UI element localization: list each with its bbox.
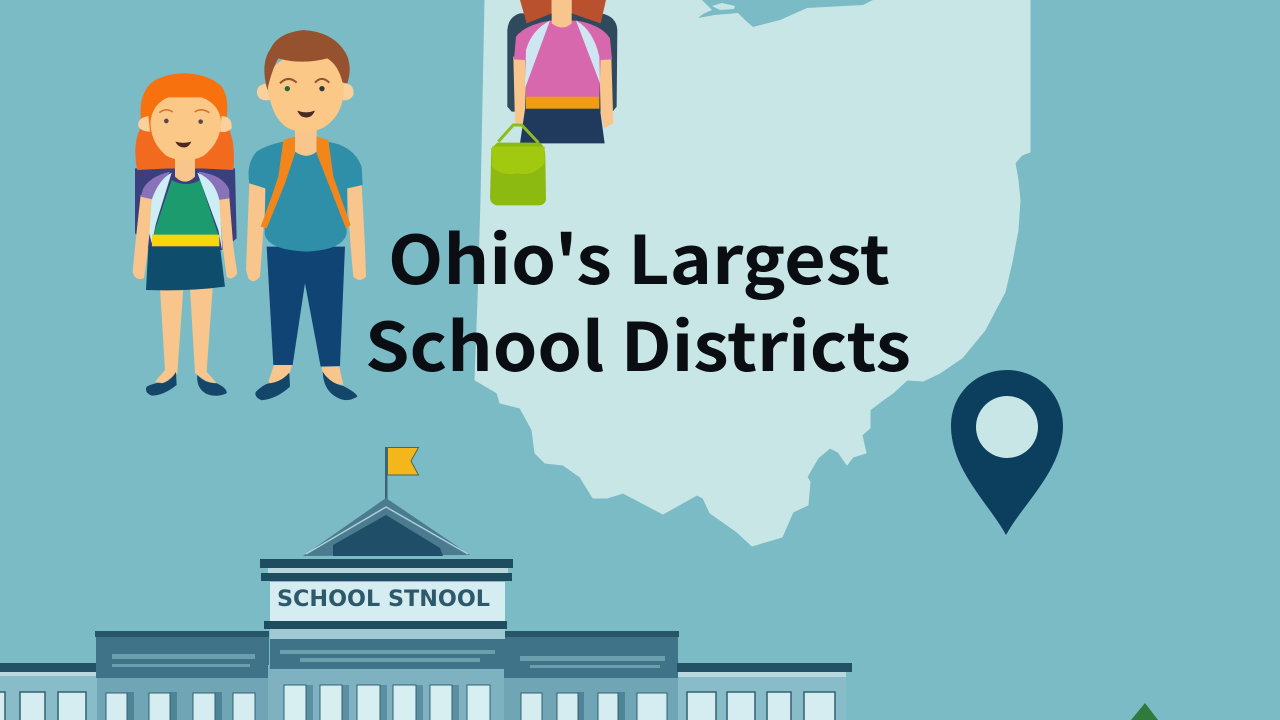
- eyebrows: [159, 110, 209, 113]
- wing windows: [106, 693, 255, 720]
- mouth: [297, 111, 315, 117]
- wing frieze texture: [112, 654, 255, 667]
- eyebrows: [280, 79, 329, 83]
- green bag handle: [498, 125, 538, 143]
- orange waistband: [526, 97, 599, 109]
- wing upper frieze: [96, 632, 269, 678]
- ears: [138, 116, 232, 132]
- wing body: [678, 671, 846, 720]
- illustration: school building: [0, 447, 852, 720]
- state shape: [475, 0, 1030, 546]
- center light band: [270, 629, 505, 639]
- center window shadows: [306, 685, 459, 720]
- teal shirt: [249, 142, 363, 252]
- face: [267, 55, 344, 132]
- right wing: [504, 631, 679, 720]
- wing windows: [521, 693, 667, 720]
- student: boy with orange backpack straps: [246, 30, 366, 400]
- ears: [257, 83, 354, 100]
- wing window shadows: [127, 692, 222, 720]
- lake erie: [698, 0, 873, 27]
- wing roof bar: [0, 663, 97, 672]
- neck: [552, 0, 572, 27]
- arms: [513, 57, 613, 128]
- center block: [260, 559, 513, 720]
- wing trim: [0, 672, 97, 676]
- wing lower body: [504, 676, 678, 720]
- wing frieze texture: [520, 656, 665, 668]
- lake island: [712, 3, 735, 10]
- pin hole: [976, 396, 1038, 458]
- face: [151, 97, 221, 160]
- title line 1: Ohio's Largest: [388, 207, 890, 304]
- sign lettering: SCHOOL STNOOL: [277, 587, 490, 612]
- green bag flap: [492, 147, 545, 174]
- arms: [133, 195, 237, 279]
- far right wing: [677, 663, 852, 720]
- yellow flag: [388, 448, 418, 475]
- right eye: [319, 86, 325, 91]
- arms: [246, 183, 366, 281]
- mouth: [175, 142, 191, 147]
- backpack: [507, 13, 617, 112]
- roof: [303, 498, 470, 556]
- eyes: [285, 86, 290, 91]
- pink shirt: [514, 21, 612, 97]
- map: Ohio: [475, 0, 1030, 546]
- orange straps: [261, 137, 351, 228]
- wing trim: [678, 672, 846, 677]
- wing lower body: [97, 676, 269, 720]
- sleeves: [141, 172, 229, 200]
- navy skirt: [146, 247, 225, 290]
- navy trousers: [267, 247, 345, 367]
- ankles: [268, 365, 343, 385]
- center lower body: [268, 665, 504, 720]
- student: girl with red hair: [133, 73, 237, 396]
- backpack: [135, 168, 237, 250]
- second cornice: [261, 573, 512, 581]
- top cornice: [260, 559, 513, 568]
- yellow belt: [152, 235, 219, 246]
- student: girl in pink shirt with green bag: [490, 0, 617, 205]
- left wing: [95, 631, 269, 720]
- white straps: [149, 173, 223, 253]
- hair: [520, 0, 606, 23]
- sign base bar: [264, 621, 507, 629]
- roof highlight: [306, 507, 468, 554]
- icon: tree top: [1131, 703, 1158, 720]
- roof pediment: [333, 515, 443, 556]
- wing windows: [0, 692, 86, 720]
- wing windows: [687, 692, 835, 720]
- hair: [264, 30, 350, 90]
- lower hair: [135, 113, 234, 170]
- title: [365, 207, 911, 391]
- wing body: [0, 671, 97, 720]
- wing roof bar: [95, 631, 269, 637]
- cornice light band: [268, 568, 508, 573]
- green bag: [490, 143, 546, 205]
- pin body: [951, 370, 1063, 535]
- neck: [175, 153, 195, 182]
- icon: location pin: [951, 370, 1063, 535]
- flag pole: [385, 447, 388, 499]
- eyes: [164, 119, 203, 124]
- wing window shadows: [578, 692, 625, 720]
- wing roof bar: [504, 631, 679, 637]
- wing upper frieze: [504, 632, 678, 678]
- far left wing: [0, 663, 97, 720]
- upper hair: [141, 73, 227, 132]
- shoes: [146, 372, 227, 396]
- center windows: [284, 685, 490, 720]
- neck: [295, 127, 317, 156]
- shoulder straps: [525, 21, 600, 88]
- title line 2: School Districts: [365, 294, 911, 391]
- center frieze texture: [280, 650, 495, 662]
- wing roof bar: [677, 663, 852, 672]
- navy skirt: [520, 109, 605, 143]
- shoes: [255, 372, 357, 400]
- legs: [155, 288, 217, 383]
- center frieze: [270, 639, 505, 669]
- sign panel: [270, 582, 505, 621]
- green shirt: [153, 180, 218, 235]
